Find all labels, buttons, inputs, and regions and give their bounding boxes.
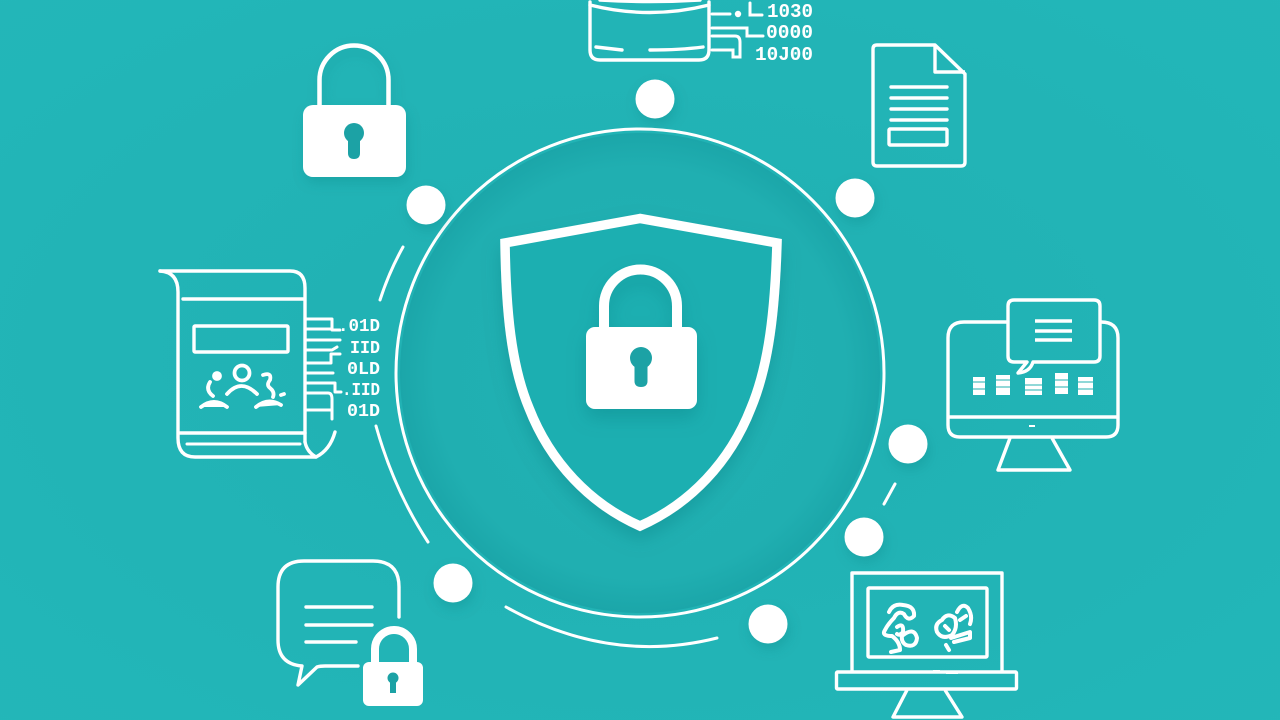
- icon: database with binary: 0000: [766, 22, 813, 44]
- outer arc segments: [376, 247, 895, 647]
- icon: laptop with figures: [836, 573, 1016, 717]
- central shield with padlock: [505, 218, 777, 526]
- figures: [884, 605, 971, 652]
- icon: book with binary: 0LD: [347, 360, 380, 380]
- binary lines: .01D: [338, 317, 380, 337]
- binary text: 1030: [767, 1, 813, 23]
- icon: database with binary: [590, 0, 813, 66]
- icon: book with binary: IID: [350, 339, 380, 359]
- icon: book with binary: 01D: [347, 402, 380, 422]
- icon: database with binary: 10J00: [755, 44, 813, 66]
- icon: monitor with speech bubble: [948, 300, 1118, 470]
- icon: shield padlock: [586, 269, 697, 409]
- connector nodes: [406, 80, 928, 644]
- central ring: [396, 129, 884, 617]
- icon: top left padlock: [303, 45, 406, 177]
- icon: book with binary: .IID: [342, 381, 380, 401]
- icon: document: [873, 45, 965, 166]
- icon: book with binary: [160, 271, 380, 457]
- icon: chat bubble with padlock: [278, 561, 423, 706]
- people group: [201, 366, 284, 407]
